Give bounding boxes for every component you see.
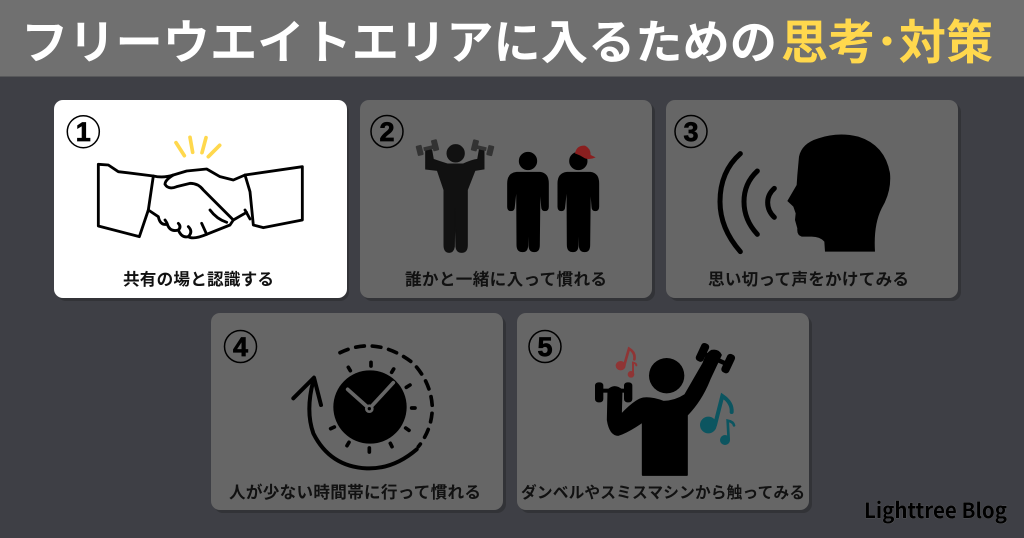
icon: red music notes	[616, 349, 636, 378]
caption 3: 思い切って声をかけてみる	[708, 266, 909, 290]
title highlight: 思考･対策	[781, 4, 993, 73]
icon: speaking head	[720, 135, 890, 252]
panel 1: shared space	[54, 100, 349, 301]
title text: フリーウエイトエリアに入るための	[21, 4, 777, 73]
caption 2: 誰かと一緒に入って慣れる	[405, 266, 607, 290]
number badge 5	[529, 330, 561, 362]
panel 3: speak up	[666, 100, 961, 301]
panel 5: dumbbells and smith machine	[517, 313, 812, 513]
icon: teal music notes	[700, 396, 734, 445]
number badge 5: 5	[537, 332, 553, 362]
number badge 3	[675, 116, 707, 148]
icon: person lifting dumbbells	[595, 342, 736, 475]
panel 2: go with someone	[360, 100, 655, 301]
number badge 4: 4	[233, 332, 248, 362]
panel 4: off-peak hours	[211, 313, 506, 513]
icon: gym person and two friends	[416, 139, 599, 252]
number badge 4	[224, 330, 256, 362]
caption 4: 人が少ない時間帯に行って慣れる	[229, 479, 481, 503]
number badge 1	[67, 116, 99, 148]
caption 5: ダンベルやスミスマシンから触ってみる	[521, 480, 805, 503]
logo text: Lighttree Blog	[864, 495, 1007, 525]
number badge 2	[371, 116, 403, 148]
number badge 1: 1	[76, 117, 91, 147]
icon: handshake	[98, 164, 302, 238]
number badge 2: 2	[379, 117, 395, 147]
caption 1: 共有の場と認識する	[123, 266, 274, 290]
icon: sparkle lines	[176, 137, 220, 157]
number badge 3: 3	[683, 117, 699, 147]
icon: clock with rotating arrow	[293, 346, 432, 468]
title banner	[0, 0, 1024, 76]
